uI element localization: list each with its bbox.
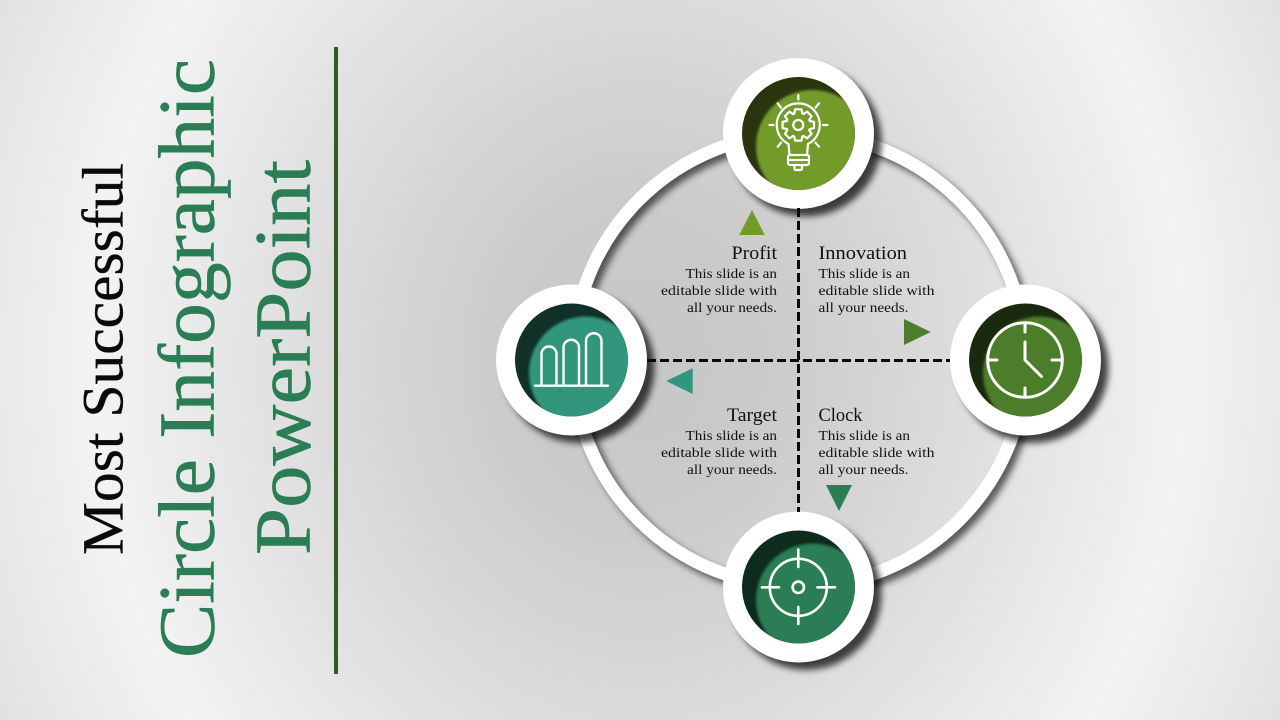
text block: Target: Target [727, 405, 778, 426]
text block: Clock: This slide is an [818, 429, 910, 444]
text block: Profit: This slide is an [686, 267, 777, 282]
dashed cross divider [647, 208, 950, 512]
text block: Clock: all your needs. [818, 463, 908, 478]
icon: lightbulb with gear [770, 95, 828, 170]
text block: Target [661, 405, 778, 478]
arrow: right [904, 319, 931, 345]
node: bottom target [723, 512, 882, 670]
arrow: up [739, 210, 765, 235]
arrow: left [666, 368, 693, 394]
text block: Clock: editable slide with [818, 446, 934, 461]
text block: Target: editable slide with [661, 446, 777, 461]
title divider bar [334, 47, 338, 674]
title line: Circle Infographic: Circle Infographic [144, 59, 232, 658]
title [70, 59, 328, 658]
text block: Target: all your needs. [687, 463, 777, 478]
text block: Innovation [818, 243, 934, 316]
text block: Innovation: This slide is an [818, 267, 910, 282]
text block: Profit: Profit [732, 243, 778, 264]
icon: target crosshair [762, 550, 835, 624]
text block: Innovation: editable slide with [818, 284, 934, 299]
circle ring [572, 134, 1030, 592]
arrow: down [826, 485, 852, 511]
node: top lightbulb [723, 58, 882, 216]
text block: Profit: all your needs. [687, 301, 777, 316]
icon: clock [988, 323, 1062, 397]
node: right clock [950, 284, 1108, 443]
title line: PowerPoint: PowerPoint [240, 160, 328, 555]
text block: Clock: Clock [818, 405, 863, 426]
text block: Innovation: all your needs. [818, 301, 908, 316]
icon: rounded bars [535, 333, 608, 386]
text block: Innovation: Innovation [818, 243, 908, 264]
text block: Profit [661, 243, 778, 316]
node: left bars [496, 284, 654, 443]
title line: Most Successful: Most Successful [70, 163, 136, 555]
text block: Target: This slide is an [686, 429, 777, 444]
text block: Clock [818, 405, 934, 478]
text block: Profit: editable slide with [661, 284, 777, 299]
